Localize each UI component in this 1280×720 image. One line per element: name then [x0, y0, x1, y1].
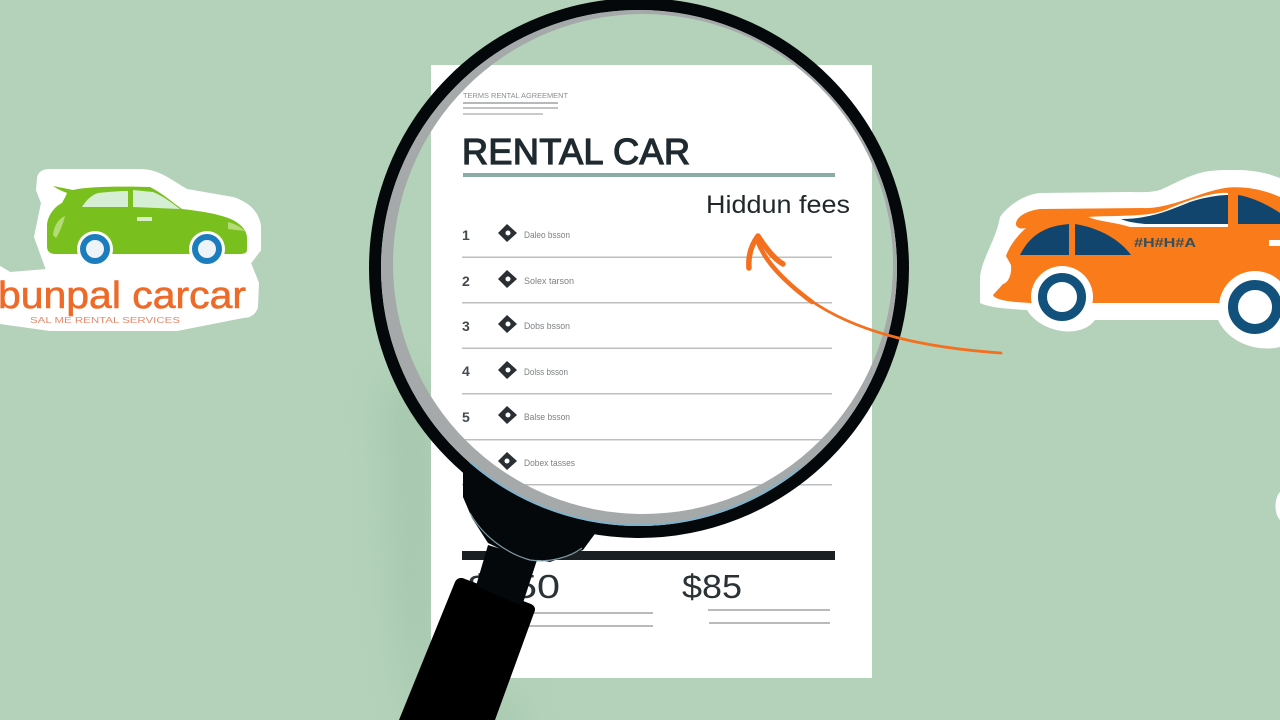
- icon: orange rental car sticker: [980, 170, 1280, 349]
- sticker backing: [0, 170, 260, 330]
- total rule: [462, 551, 835, 560]
- row 4: 4: [462, 363, 470, 379]
- row 5: Balse bsson: [524, 412, 570, 422]
- icon: green rental car sticker: [0, 170, 260, 330]
- collar highlight: [470, 513, 582, 561]
- row 5: [462, 406, 832, 440]
- panel: rental car document: [431, 65, 872, 678]
- sticker backing: [980, 170, 1280, 349]
- fee list: [462, 224, 832, 486]
- magnifier collar: [463, 470, 597, 562]
- car body: [993, 187, 1280, 303]
- car body: [47, 186, 247, 254]
- side logo decal: #H#H#A: [1134, 235, 1197, 250]
- magnifying glass: [375, 4, 903, 720]
- row 6: [462, 452, 832, 486]
- row 2: [462, 270, 832, 304]
- car windows: [82, 191, 128, 207]
- hidden fees label: Hiddun fees: [706, 191, 850, 219]
- tail light: [53, 216, 65, 238]
- row 1: [462, 224, 832, 258]
- row 1: 1: [462, 227, 470, 243]
- row 3: 3: [462, 318, 470, 334]
- row 6: Dobex tasses: [524, 458, 575, 468]
- row 4: [462, 361, 832, 394]
- left price: $150: [468, 568, 560, 605]
- door handle: [137, 217, 152, 221]
- rear wheel: [189, 231, 225, 267]
- header fine print: [463, 93, 569, 115]
- row 2: 2: [462, 273, 470, 289]
- white roof stripe: [1088, 193, 1228, 227]
- icon: white corner fragment: [1276, 492, 1280, 520]
- front wheel: [77, 231, 113, 267]
- front wheel: [1219, 271, 1280, 343]
- row 4: Dolss bsson: [524, 367, 568, 377]
- upper windows: [1121, 195, 1228, 224]
- magnifier neck: [476, 545, 537, 606]
- right price: $85: [682, 568, 742, 605]
- row 5: 5: [462, 409, 470, 425]
- row 2: Solex tarson: [524, 276, 574, 286]
- rear windows: [1020, 224, 1069, 255]
- row 3: Dobs bsson: [524, 321, 570, 331]
- door handle: [1269, 240, 1280, 246]
- lens edge glint: [470, 462, 800, 525]
- brand name: bunpal carcar: [0, 275, 246, 317]
- title: RENTAL CAR: [462, 131, 690, 172]
- header fine print: TERMS RENTAL AGREEMENT: [463, 93, 569, 100]
- row 3: [462, 315, 832, 349]
- magnifier rim: [375, 4, 903, 532]
- rear wheel: [1031, 266, 1093, 328]
- magnifier shadow: [385, 380, 520, 720]
- magnifier handle: [399, 578, 535, 720]
- title underline: [463, 173, 835, 177]
- row 1: Daleo bsson: [524, 230, 570, 240]
- arrow: hidden fees pointer: [749, 236, 1001, 353]
- brand tagline: SAL ME RENTAL SERVICES: [30, 316, 180, 325]
- rim highlight: [381, 10, 897, 526]
- headlight: [228, 222, 245, 231]
